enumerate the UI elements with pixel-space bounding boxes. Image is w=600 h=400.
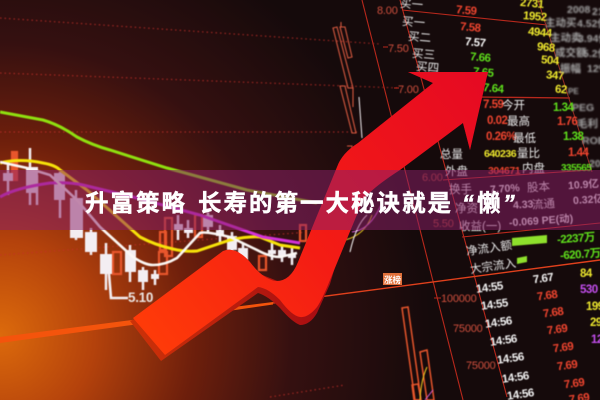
trade times: 14:56 bbox=[501, 370, 530, 386]
title: 长寿的第一大秘诀就是 bbox=[198, 190, 453, 216]
white candles bbox=[3, 97, 362, 298]
quote rows: 0.02 bbox=[487, 115, 507, 127]
trade times bbox=[475, 280, 535, 400]
blurred grey statistics column bbox=[545, 4, 600, 170]
stock data table bbox=[377, 0, 600, 400]
price axis labels bbox=[377, 5, 496, 372]
order book volumes: 1952 bbox=[523, 10, 547, 24]
moving average: yellow bbox=[0, 160, 300, 251]
order book prices: 7.57 bbox=[465, 36, 486, 50]
quote rows: 0.26% bbox=[486, 131, 516, 143]
price axis labels: 7.00 bbox=[398, 84, 419, 96]
trade times: 14:56 bbox=[484, 315, 513, 331]
quote rows bbox=[440, 98, 592, 178]
blurred grey statistics column: PEG bbox=[572, 102, 594, 114]
price axis labels: 100000 bbox=[441, 293, 477, 305]
hollow red candles bbox=[12, 22, 434, 400]
quote rows: 304671 bbox=[488, 165, 521, 177]
order book labels: 买三 bbox=[411, 47, 436, 62]
blurred grey statistics column: 主动买 bbox=[545, 16, 577, 29]
blurred grey statistics column: 成交额 bbox=[555, 46, 587, 59]
trade times: 14:55 bbox=[480, 297, 510, 313]
trade prices: 7.69 bbox=[563, 377, 585, 391]
blurred grey statistics column: 毛利 bbox=[577, 117, 598, 130]
title: “ bbox=[462, 190, 476, 216]
price axis labels: 6.00 bbox=[422, 172, 443, 184]
quote rows: 7.59 bbox=[483, 99, 503, 111]
moving average: green bbox=[0, 112, 317, 203]
red rising arrow bbox=[130, 72, 488, 361]
quote rows: 1.38 bbox=[563, 131, 584, 143]
order book prices: 7.64 bbox=[483, 82, 505, 96]
trade prices: 7.69 bbox=[552, 341, 574, 355]
title: ” bbox=[503, 190, 517, 216]
thin lines on the right of the chart bbox=[345, 205, 433, 400]
trade prices: 7.68 bbox=[542, 306, 565, 320]
quote rows: 今开 bbox=[502, 98, 525, 112]
order book labels bbox=[399, 0, 440, 75]
quote rows: 1.76 bbox=[557, 116, 577, 128]
price axis labels: 75000 bbox=[453, 323, 483, 335]
blurred grey statistics column: 2008 bbox=[567, 4, 591, 16]
order book prices bbox=[456, 4, 505, 96]
blurred grey statistics column: 主动卖 bbox=[550, 31, 582, 44]
blurred grey statistics column: PE bbox=[568, 87, 579, 96]
order book labels: 买四 bbox=[415, 60, 440, 75]
tag: market label: 涨榜 bbox=[384, 275, 402, 285]
low price label: 5.10 bbox=[128, 290, 153, 305]
trade volumes: 530 bbox=[580, 284, 598, 296]
quote rows: 1.44 bbox=[568, 147, 589, 159]
net inflow rows: -620.7万 bbox=[560, 247, 600, 262]
blurred grey statistics column: 振幅 bbox=[560, 62, 581, 75]
order book volumes: 347 bbox=[546, 69, 564, 83]
order book volumes: 62 bbox=[554, 84, 567, 96]
order book prices: 7.59 bbox=[456, 4, 477, 18]
title band bbox=[0, 170, 600, 230]
orange horizon line bbox=[0, 302, 273, 343]
quote rows: 最高 bbox=[507, 114, 530, 128]
price axis labels: 8.00 bbox=[377, 5, 398, 17]
trade prices: 7.69 bbox=[546, 323, 568, 337]
fundamentals rows: -0.069 PE(动) bbox=[509, 213, 574, 229]
order book prices: 7.66 bbox=[470, 51, 491, 65]
quote rows: 量比 bbox=[517, 147, 540, 160]
price axis labels: 5.50 bbox=[433, 218, 454, 230]
chart guide lines bbox=[0, 18, 400, 397]
title: 升富策略 bbox=[85, 189, 187, 216]
order book labels: 买二 bbox=[407, 30, 432, 45]
order book labels: 买一 bbox=[401, 15, 426, 30]
net inflow rows: 净流入额 bbox=[465, 238, 513, 258]
quote rows: 1.34 bbox=[553, 102, 574, 114]
quote rows: 最低 bbox=[513, 132, 536, 145]
net inflow rows: -2237万 bbox=[557, 231, 595, 246]
moving average: purple bbox=[0, 183, 300, 243]
order book volumes bbox=[520, 0, 567, 96]
quote rows: 总量 bbox=[440, 147, 463, 161]
price axis labels: 75000 bbox=[466, 360, 496, 372]
title: 懒 bbox=[477, 190, 502, 216]
trade prices: 7.68 bbox=[536, 289, 559, 303]
trade volumes bbox=[580, 268, 600, 346]
candlestick chart bbox=[0, 18, 434, 400]
fundamentals rows: 10.9亿 bbox=[568, 177, 600, 192]
table grid lines bbox=[273, 0, 600, 400]
quote rows: 外盘 bbox=[445, 164, 468, 178]
order book prices: 7.58 bbox=[460, 21, 482, 35]
quote rows: 640236 bbox=[484, 148, 517, 160]
arrow face bbox=[133, 72, 488, 355]
trade times: 14:56 bbox=[489, 333, 518, 349]
fundamentals rows: 净资 bbox=[455, 201, 478, 215]
moving average: white bbox=[0, 162, 297, 265]
quote rows: 内盘 bbox=[522, 161, 545, 175]
net inflow rows bbox=[465, 231, 600, 276]
trade volumes: 84 bbox=[580, 268, 593, 280]
quote rows: 335565 bbox=[561, 163, 592, 174]
trade times: 14:55 bbox=[475, 280, 505, 296]
order book volumes: 504 bbox=[541, 54, 560, 68]
trade times: 14:56 bbox=[496, 351, 525, 367]
fundamentals rows: 7.70% bbox=[490, 182, 521, 196]
fundamentals rows: 4.33 bbox=[513, 198, 534, 212]
fundamentals rows bbox=[449, 177, 600, 233]
trade prices: 7.69 bbox=[556, 359, 578, 373]
trade prices: 7.67 bbox=[532, 272, 554, 286]
price axis labels: 7.50 bbox=[388, 43, 409, 55]
order book volumes: 4944 bbox=[528, 26, 553, 40]
arrow side shading bbox=[130, 250, 340, 361]
fundamentals rows: 股本 bbox=[527, 179, 551, 195]
order book volumes: 968 bbox=[537, 41, 556, 55]
net inflow rows: 大宗流入 bbox=[469, 256, 517, 276]
fundamentals rows: 收益(一) bbox=[459, 219, 501, 233]
fundamentals rows: 流通 bbox=[532, 196, 556, 212]
trade prices bbox=[532, 272, 590, 400]
order book prices: 7.65 bbox=[473, 66, 495, 80]
fundamentals rows: 换手 bbox=[449, 182, 472, 196]
